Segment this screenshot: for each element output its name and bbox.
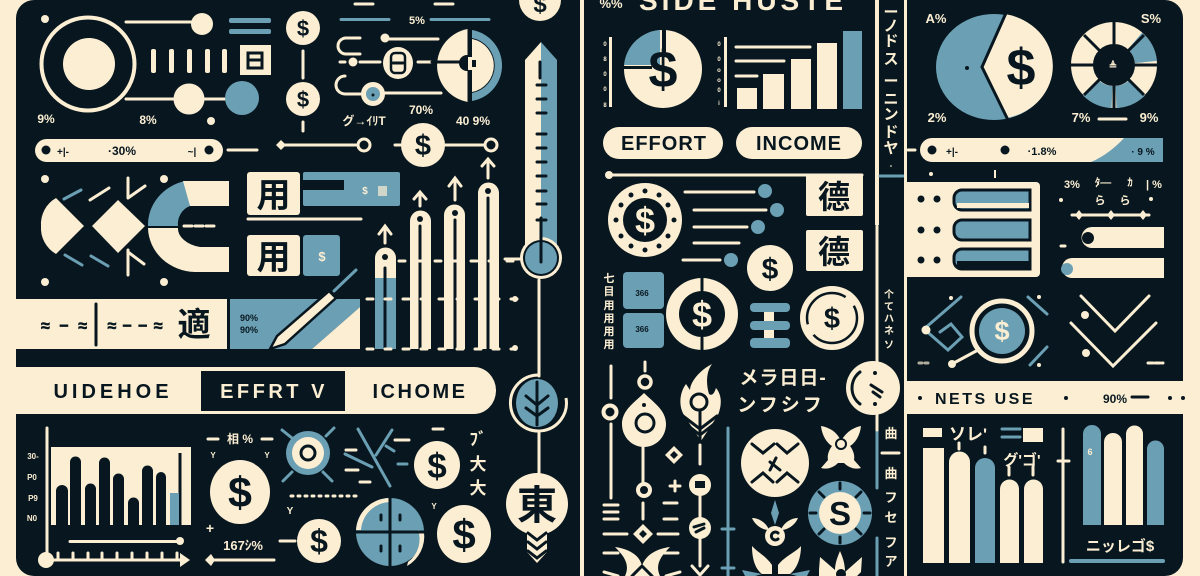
panel: left (0, 0, 580, 576)
coin: $ (762, 253, 779, 286)
top dashes: 5% (409, 15, 425, 27)
quarter pie (356, 498, 424, 566)
vertical text column: 个 (884, 289, 894, 301)
title banner: UIDEHOE (53, 381, 173, 403)
glyph column: 用 (604, 299, 614, 312)
feather (680, 364, 721, 575)
dollar pie (622, 25, 702, 108)
slider bottom (126, 81, 259, 115)
bar chart: P9 (28, 494, 38, 503)
kanji circle: 東 (517, 484, 557, 528)
connector line and kanji boxes: 德 (818, 179, 850, 215)
ruler (525, 42, 557, 247)
mini labels: ﾀ— (1095, 176, 1111, 189)
centre vertical (846, 226, 900, 576)
coin small: $ (310, 523, 328, 559)
drop icon and chain (622, 362, 666, 544)
crown leaf (819, 551, 862, 576)
glyph column: 用 (604, 325, 614, 338)
pie labels (926, 11, 1162, 125)
ring coin (608, 183, 682, 257)
scale column 2: 0 (717, 42, 721, 48)
bars chart left: グ'ゴ' (1003, 451, 1041, 469)
pencil strip: ≈−−≈ (108, 318, 163, 335)
pencil strip: 90% (240, 313, 258, 323)
bars chart right: 6 (1087, 447, 1093, 457)
scale column 1: 0 (603, 72, 607, 78)
nets use band (905, 381, 1200, 414)
target icon (282, 428, 334, 481)
coin labels: 相 % (227, 431, 253, 446)
connector line and kanji boxes (605, 171, 863, 271)
katakana column: 大 (470, 455, 486, 474)
outlined coin (800, 286, 864, 350)
pencil strip: 適 (178, 306, 210, 343)
vertical text column: ド (883, 124, 899, 141)
big ring coin (666, 272, 738, 350)
coin labels (205, 431, 437, 566)
pencil strip (0, 270, 360, 349)
lines with blue dots (683, 184, 784, 267)
pie labels: 2% (928, 110, 947, 125)
title banner: EFFRT V (220, 381, 328, 403)
vertical text column: ー (883, 73, 899, 90)
zigzag circle (741, 429, 809, 497)
crossed lines icon (345, 429, 409, 486)
katakana column: 大 (470, 479, 486, 498)
pie labels: S% (1141, 11, 1162, 26)
vertical text column: ド (883, 33, 899, 50)
progress bar (35, 139, 257, 162)
rising bars (367, 159, 520, 351)
vertical text column: ネ (884, 325, 894, 337)
vertical chain left (604, 366, 678, 553)
scale column 2: i (718, 101, 720, 107)
magnifier: $ (994, 316, 1010, 346)
caption labels (342, 103, 490, 128)
coin column (286, 11, 320, 131)
leaf badge (510, 375, 566, 476)
coin column: $ (297, 16, 309, 41)
vertical text column: - (890, 161, 893, 170)
coin right: $ (427, 447, 447, 486)
vertical text column: セ (884, 510, 898, 525)
vertical text column: て (884, 302, 894, 313)
mini labels: ｶ (1127, 176, 1133, 189)
coin labels: Y (210, 451, 216, 460)
ruler dial (520, 218, 562, 376)
leaf bottom left (604, 547, 680, 576)
kanji circle (506, 473, 568, 563)
percentage labels (37, 112, 215, 127)
bar chart: N0 (27, 514, 38, 523)
katakana heading: ンフシフ (737, 395, 825, 416)
connector line and kanji boxes: 德 (818, 234, 850, 270)
nets use band: 90% (1103, 392, 1127, 406)
glyph column: 用 (604, 338, 614, 351)
pencil strip: ≈−≈ (41, 318, 87, 335)
scale column 1: 0 (603, 42, 607, 48)
vertical text column: ハ (884, 314, 894, 325)
blue white pie: $ (1007, 39, 1036, 97)
mini labels: | % (1146, 179, 1162, 191)
vertical text column (880, 4, 903, 569)
pill: effort: EFFORT (621, 133, 707, 155)
coin large: $ (228, 469, 252, 517)
bars chart right: ニッレゴ$ (1086, 537, 1155, 555)
katakana column (433, 429, 486, 498)
outlined coin: $ (824, 303, 840, 335)
bar chart: P0 (27, 473, 37, 482)
caption labels: 70% (409, 103, 433, 117)
segmented donut (1071, 22, 1157, 108)
vertical text column: ソ (884, 340, 894, 351)
percentage labels: 9% (37, 112, 55, 126)
flower (821, 426, 861, 469)
cream server panel (905, 182, 1040, 277)
vertical text column: 曲 (884, 426, 898, 441)
progress bar right: +|- (946, 147, 958, 158)
vertical text column: 曲 (884, 466, 898, 481)
scale column 2: 0 (717, 88, 721, 94)
vertical ticks (151, 49, 227, 73)
panel: middle (580, 0, 905, 576)
coin labels: + (206, 520, 214, 536)
glyph column: 用 (604, 312, 614, 325)
glyph column: 七 (604, 272, 614, 285)
label box 1: $ (362, 186, 368, 197)
bars chart left (923, 425, 1069, 563)
vertical text column: ニ (883, 91, 899, 108)
coin labels: Y (287, 506, 294, 517)
coin labels: Y (264, 451, 270, 460)
glyph column: 目 (604, 285, 614, 298)
chevrons (1071, 296, 1163, 366)
small square icon (240, 45, 271, 75)
slider top (126, 13, 213, 35)
blue white pie (936, 13, 1053, 120)
vertical text column: フ (884, 490, 898, 505)
magnifier (919, 295, 1047, 368)
percentage labels: 8% (139, 113, 157, 127)
glyph column (604, 272, 614, 351)
label box 2: $ (318, 249, 326, 264)
coin labels: Y (431, 502, 437, 511)
mini labels (1059, 176, 1162, 207)
ring gauge (41, 15, 134, 110)
blue value boxes (623, 272, 664, 348)
progress bar right: · 9 % (1131, 147, 1155, 158)
vertical text column: ン (883, 106, 899, 123)
small track (1072, 210, 1149, 220)
stacked pills (750, 303, 790, 348)
coin small (297, 519, 341, 563)
nets use band: NETS USE (935, 391, 1035, 408)
timeline with dollar: $ (415, 130, 431, 162)
blue vertical rule (722, 428, 734, 576)
coin column: $ (297, 87, 309, 112)
ring coin: $ (635, 200, 655, 241)
mini labels: ら (1094, 194, 1106, 207)
segmented donut: ≜ (1109, 60, 1117, 72)
vertical text column: ア (884, 554, 898, 569)
coin bottom right (437, 505, 491, 563)
blue bars (229, 18, 271, 34)
magnet (148, 181, 229, 272)
katakana column: ﾌﾞ (470, 430, 486, 449)
dotted line (291, 494, 358, 498)
progress bar: +|- (57, 147, 69, 158)
big ring coin: $ (692, 294, 712, 335)
label box 1: 用 (256, 177, 290, 215)
label box 1 (247, 172, 400, 219)
sprout (742, 500, 810, 576)
scale column 1: 8 (603, 103, 607, 109)
scale column 1: 8 (603, 57, 607, 63)
bar chart (27, 428, 191, 568)
panel: right (904, 0, 1200, 576)
blue value boxes: 366 (635, 289, 649, 298)
vertical text column: ノ (883, 18, 899, 35)
blue value boxes: 366 (635, 325, 649, 334)
vertical text column: フ (884, 535, 898, 550)
label box 2: 用 (256, 239, 290, 277)
coin large (210, 460, 270, 524)
tag bars (1061, 227, 1164, 278)
title banner (0, 367, 496, 414)
coin (747, 245, 793, 291)
bars chart left: ソレ' (949, 425, 987, 444)
caption labels: 40 9% (456, 114, 490, 128)
s chip: S (829, 495, 851, 532)
progress bar right (908, 138, 1163, 162)
flow diagram (336, 34, 441, 106)
half pie chart (432, 29, 502, 102)
ticks (929, 170, 996, 178)
coin right (414, 441, 460, 489)
scale column 2 (717, 37, 727, 107)
progress bar: ~| (188, 147, 197, 158)
caption labels: グ→ｲﾘT (342, 113, 386, 128)
growth bars (736, 31, 862, 109)
pie labels: 7% (1072, 110, 1091, 125)
katakana heading (737, 368, 827, 416)
scale column 1 (603, 37, 612, 109)
pill: income (736, 127, 862, 159)
scale column 2: o (717, 68, 721, 74)
mini labels: ら (1120, 194, 1130, 207)
pill: effort (603, 127, 723, 159)
vertical text column: ヤ (883, 140, 899, 157)
s chip (808, 481, 872, 545)
bar chart: 30- (27, 452, 39, 461)
label box 2 (247, 235, 340, 277)
dollar pie: $ (649, 41, 678, 99)
vertical text column: ス (883, 51, 899, 68)
pie labels: 9% (1140, 110, 1159, 125)
vertical text column: ー (883, 4, 899, 21)
katakana heading: メラ日日- (739, 368, 827, 389)
coin bottom right: $ (452, 511, 476, 558)
scale column 2: o (717, 78, 721, 84)
pencil strip: 90% (240, 325, 258, 335)
progress bar: ·30% (108, 144, 136, 158)
bars chart right (1069, 425, 1165, 563)
coin top right (519, 0, 561, 21)
scale column 1: 0 (603, 87, 607, 93)
title banner: ICHOME (372, 381, 468, 403)
pill: income: INCOME (756, 133, 842, 155)
timeline with dollar (276, 123, 497, 167)
chain icons (664, 446, 711, 539)
coin labels: 167ｼ% (223, 538, 263, 553)
diamonds (41, 175, 168, 286)
progress bar right: ·1.8% (1028, 146, 1057, 158)
scale column 2: 0 (717, 57, 721, 63)
mini labels: 3% (1064, 179, 1080, 191)
pie labels: A% (926, 11, 947, 26)
